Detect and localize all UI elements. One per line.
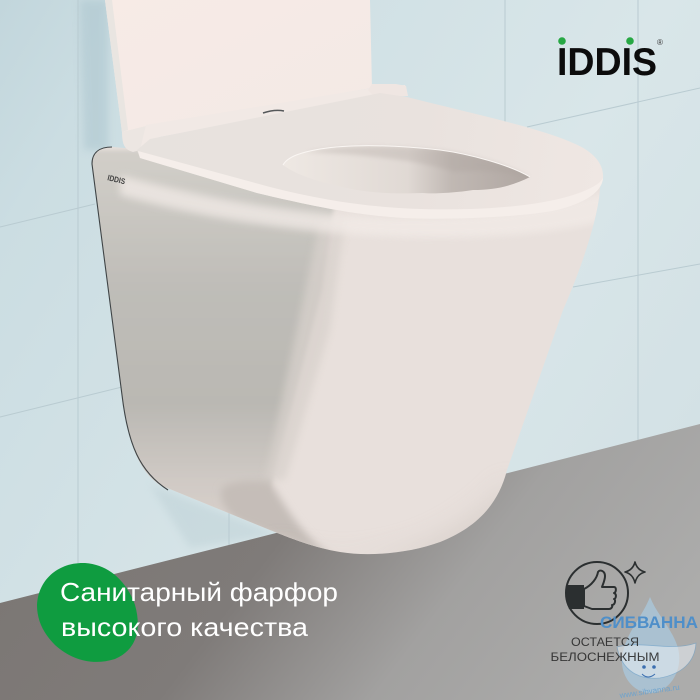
- green blob: [37, 563, 138, 662]
- heading: [60, 577, 338, 642]
- brand logo: IDDIS: ®: [657, 38, 663, 47]
- caption: [550, 637, 660, 664]
- icon: thumbs up: [566, 562, 628, 624]
- watermark: www.sibvanna.ru: [618, 683, 680, 700]
- heading: высокого качества: [61, 612, 309, 642]
- icon: sparkle: [625, 562, 645, 583]
- toilet seat: [137, 93, 603, 219]
- toilet lid: [105, 0, 408, 152]
- floor: [0, 424, 700, 700]
- logo on bowl: IDDIS: [107, 173, 127, 186]
- caption: БЕЛОСНЕЖНЫМ: [550, 652, 660, 664]
- heading: Санитарный фарфор: [60, 577, 338, 607]
- watermark: СИБВАННА: [600, 614, 698, 632]
- watermark: [600, 597, 698, 700]
- toilet bowl: [60, 147, 610, 560]
- brand logo: IDDIS: IDDIS: [557, 41, 657, 84]
- caption: ОСТАЕТСЯ: [571, 637, 639, 649]
